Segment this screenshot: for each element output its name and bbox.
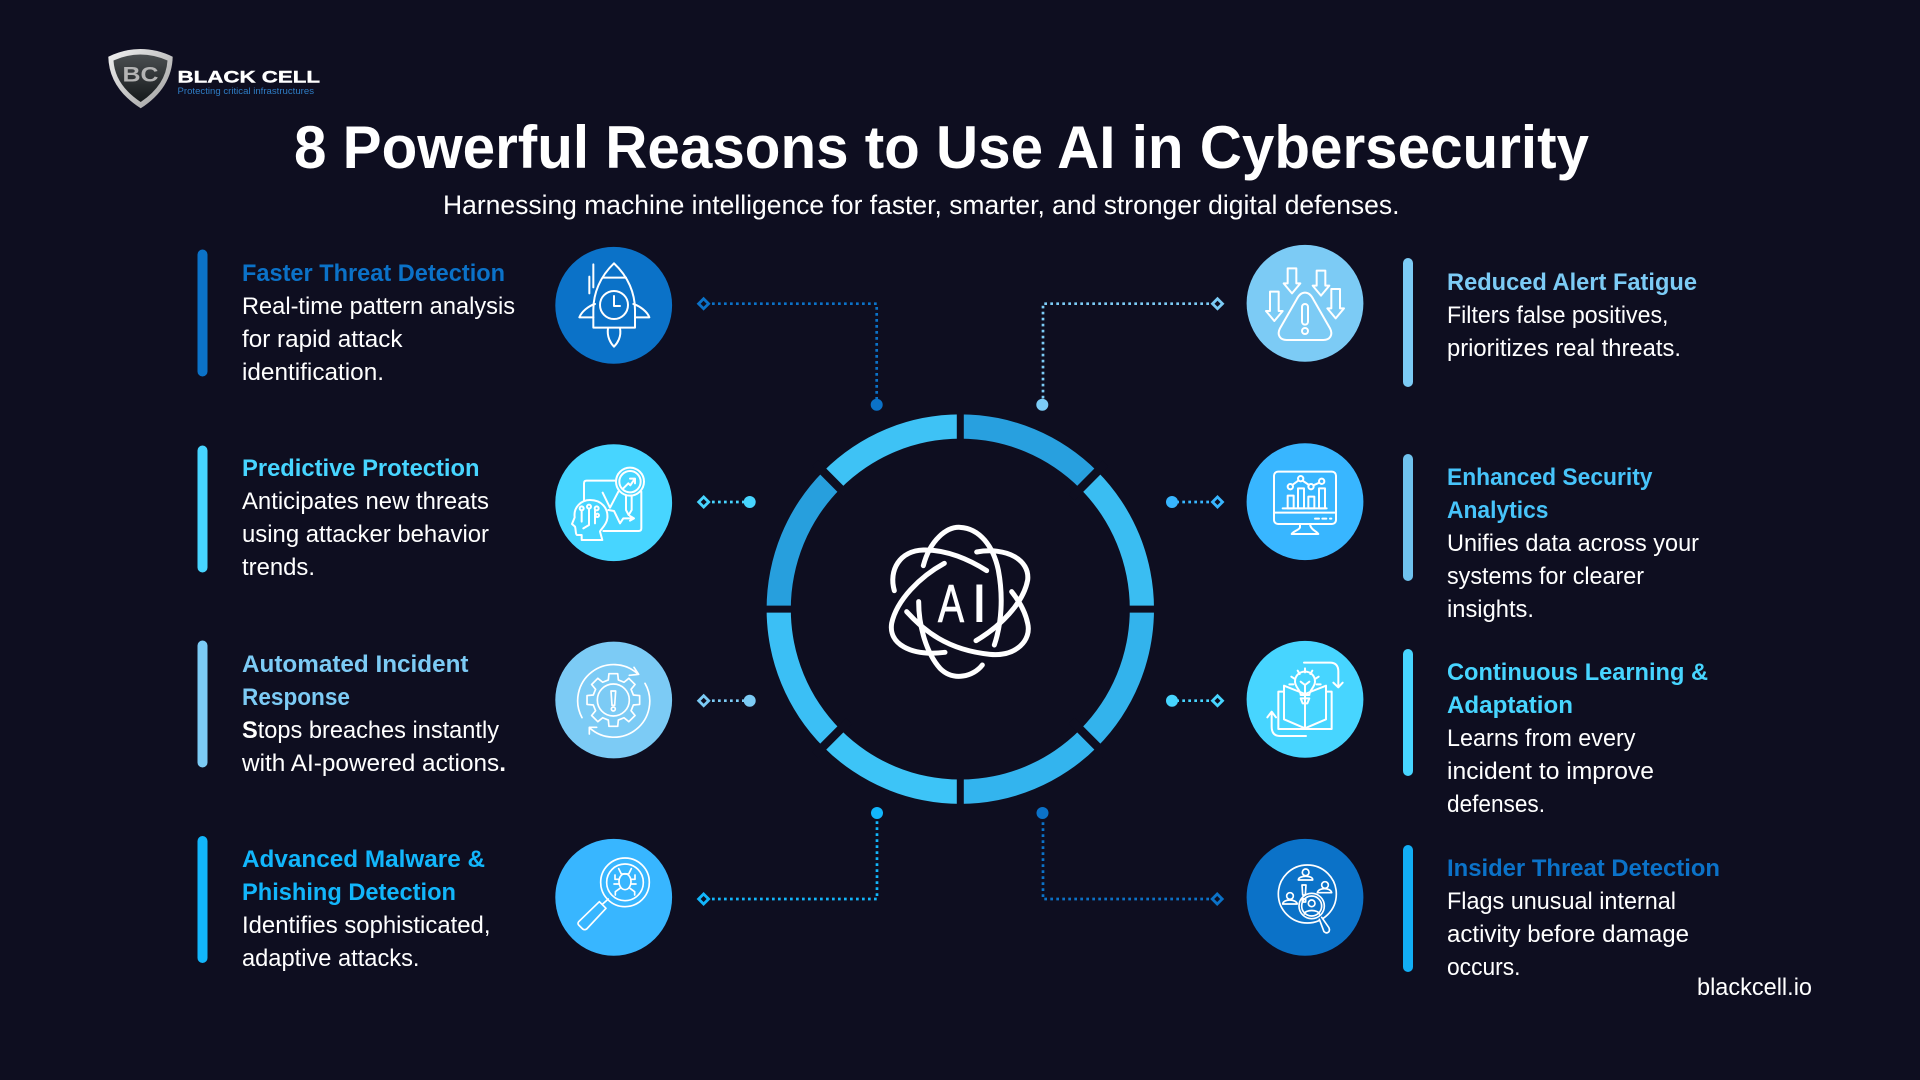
description: trends. (242, 554, 315, 581)
icon: rocket with clock (555, 247, 672, 364)
panel: faster threat detection (198, 250, 515, 386)
description: Unifies data across your (1447, 530, 1699, 557)
description: defenses. (1447, 791, 1545, 818)
description (1447, 888, 1689, 981)
icon: book with light bulb (1247, 641, 1363, 758)
panel: automated incident response (198, 640, 506, 777)
heading: Reduced Alert Fatigue (1447, 269, 1697, 296)
heading: Phishing Detection (242, 879, 456, 906)
description (1447, 302, 1681, 362)
description: systems for clearer (1447, 563, 1644, 590)
connector: predictive protection (699, 496, 756, 508)
connector: enhanced security analytics (1166, 496, 1222, 508)
logo wordmark: BLACK CELL (178, 68, 320, 87)
description: insights. (1447, 596, 1534, 623)
panel: advanced malware and phishing detection (198, 836, 490, 972)
description (1447, 530, 1699, 623)
heading: Predictive Protection (242, 455, 480, 482)
connector: advanced malware detection (699, 807, 883, 904)
heading: Analytics (1447, 497, 1548, 524)
heading (242, 651, 468, 711)
connector: automated incident response (699, 695, 756, 707)
panel: continuous learning and adaptation (1403, 649, 1708, 818)
icon: monitor with analytics (1247, 443, 1363, 560)
description: incident to improve (1447, 758, 1654, 785)
description: Flags unusual internal (1447, 888, 1676, 915)
description: Real-time pattern analysis (242, 293, 515, 320)
heading: Insider Threat Detection (1447, 855, 1720, 882)
icon: predictive head and magnifier (555, 444, 672, 561)
panel: insider threat detection (1403, 845, 1720, 981)
accent bar (198, 640, 208, 768)
connector: faster threat detection (699, 299, 883, 411)
accent bar (198, 250, 208, 376)
logo tagline: Protecting critical infrastructures (178, 86, 315, 96)
icon: insider threat search (1247, 839, 1363, 956)
accent bar (198, 836, 208, 963)
description: Anticipates new threats (242, 488, 489, 515)
accent bar (198, 446, 208, 572)
heading: Continuous Learning & (1447, 659, 1708, 686)
description: occurs. (1447, 954, 1520, 981)
title: 8 Powerful Reasons to Use AI in Cybersecurity (294, 114, 1590, 181)
heading: Faster Threat Detection (242, 260, 505, 287)
description: activity before damage (1447, 921, 1689, 948)
accent bar (1403, 258, 1413, 387)
description: adaptive attacks. (242, 945, 420, 972)
icon: alert triangle with arrows (1247, 245, 1363, 362)
icon: AI atom: I (972, 575, 987, 634)
panel: reduced alert fatigue (1403, 258, 1697, 387)
description: identification. (242, 359, 384, 386)
icon: shield: BC (122, 64, 158, 87)
description: Filters false positives, (1447, 302, 1668, 329)
accent bar (1403, 454, 1413, 581)
icon: gear with alert (555, 642, 672, 758)
connector: insider threat detection (1036, 807, 1222, 904)
description: using attacker behavior (242, 521, 489, 548)
description (241, 717, 506, 777)
description: Identifies sophisticated, (242, 912, 490, 939)
panel: predictive protection (198, 446, 489, 581)
heading (242, 846, 485, 906)
connector: continuous learning (1166, 695, 1222, 707)
heading: Adaptation (1447, 692, 1573, 719)
panel: enhanced security analytics (1403, 454, 1699, 623)
central segmented ring (758, 405, 1162, 813)
accent bar (1403, 649, 1413, 776)
icon: magnifier with bug (555, 839, 672, 956)
logo: Black Cell (108, 49, 320, 108)
description: Learns from every (1447, 725, 1636, 752)
description: for rapid attack (242, 326, 403, 353)
description (1447, 725, 1654, 818)
description (242, 293, 515, 386)
heading (1447, 659, 1708, 719)
heading: Automated Incident (242, 651, 468, 678)
description (242, 912, 490, 972)
description: prioritizes real threats. (1447, 335, 1681, 362)
description (242, 488, 489, 581)
icon: shield (108, 49, 173, 108)
description: with AI-powered actions. (241, 750, 506, 777)
heading (1447, 464, 1653, 524)
subtitle: Harnessing machine intelligence for faster, smarter, and stronger digital defenses. (443, 190, 1400, 220)
heading: Advanced Malware & (242, 846, 485, 873)
accent bar (1403, 845, 1413, 972)
icon: AI atom (891, 527, 1028, 676)
heading: Enhanced Security (1447, 464, 1653, 491)
connector: reduced alert fatigue (1036, 299, 1222, 411)
heading: Response (242, 684, 350, 711)
description: Stops breaches instantly (242, 717, 500, 744)
website url: blackcell.io (1697, 974, 1812, 1001)
icon: AI atom: A (938, 575, 964, 634)
